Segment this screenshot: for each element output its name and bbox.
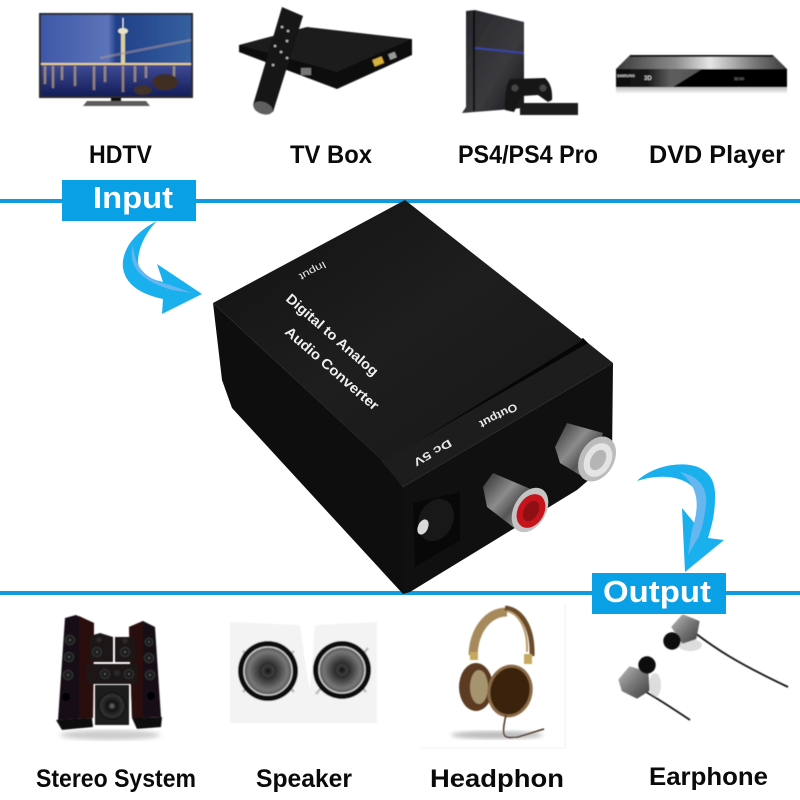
printed text: Output: Output	[477, 400, 519, 430]
icon: DVD player: 3D	[644, 76, 652, 82]
printed text: Dc 5V: Dc 5V	[410, 436, 454, 468]
badge: Input: Input	[93, 180, 173, 215]
device front face	[403, 363, 613, 594]
icon: DVD player: 32:00	[734, 76, 745, 81]
DC power jack	[411, 492, 461, 567]
printed text: Digital to Analog: Digital to Analog	[283, 290, 382, 379]
icon: HDTV	[39, 13, 193, 106]
label: TV Box: TV Box	[290, 141, 372, 169]
label: Headphon: Headphon	[430, 765, 564, 793]
badge: Output: Output	[603, 574, 711, 609]
device top face	[213, 200, 583, 462]
icon: stereo system	[56, 615, 162, 740]
label: DVD Player: DVD Player	[649, 141, 785, 169]
red RCA socket	[483, 473, 556, 539]
label: PS4/PS4 Pro: PS4/PS4 Pro	[458, 141, 598, 169]
icon: PS4 console	[462, 10, 578, 115]
arrow: input	[123, 221, 202, 314]
divider line: input	[0, 199, 800, 203]
icon: earphones	[620, 616, 788, 720]
icon: TV box	[239, 7, 412, 117]
label: Stereo System: Stereo System	[36, 765, 196, 793]
device front strip	[382, 343, 613, 487]
device side face	[213, 303, 403, 594]
device: digital to analog audio converter	[213, 200, 624, 594]
badge: Output	[592, 573, 726, 614]
icon: speaker pair	[230, 622, 377, 723]
white RCA socket	[555, 423, 624, 488]
label: Speaker: Speaker	[256, 765, 352, 793]
device slot backing	[382, 338, 590, 470]
divider line: output	[0, 591, 800, 595]
printed text: Input: Input	[297, 258, 328, 282]
icon: DVD player	[616, 55, 787, 94]
label: Earphone: Earphone	[649, 763, 768, 791]
icon: headphones	[421, 604, 565, 748]
arrow: output	[637, 464, 724, 572]
icon: DVD player: SAMSUNG	[617, 74, 635, 78]
badge: Input	[62, 180, 196, 221]
printed text: Audio Converter: Audio Converter	[282, 323, 383, 414]
label: HDTV: HDTV	[89, 141, 152, 169]
